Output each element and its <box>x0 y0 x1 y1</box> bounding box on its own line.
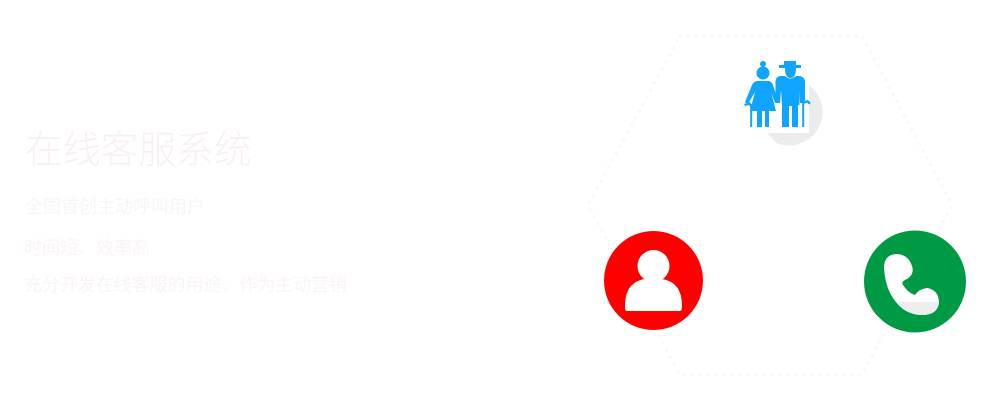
text: first feature: 全国首创主动呼叫用户 <box>25 197 205 217</box>
text block: features <box>24 197 347 295</box>
dotted hexagon outline <box>588 36 952 375</box>
text: second feature: 时间短、效率高 <box>24 238 150 258</box>
title: 在线客服系统 <box>25 130 252 172</box>
icon: red user circle <box>604 231 703 330</box>
icon: green phone circle <box>864 230 966 332</box>
text: third feature: 充分开发在线客服的用途，作为主动营销 <box>24 275 347 295</box>
icon: elderly couple <box>744 60 822 147</box>
